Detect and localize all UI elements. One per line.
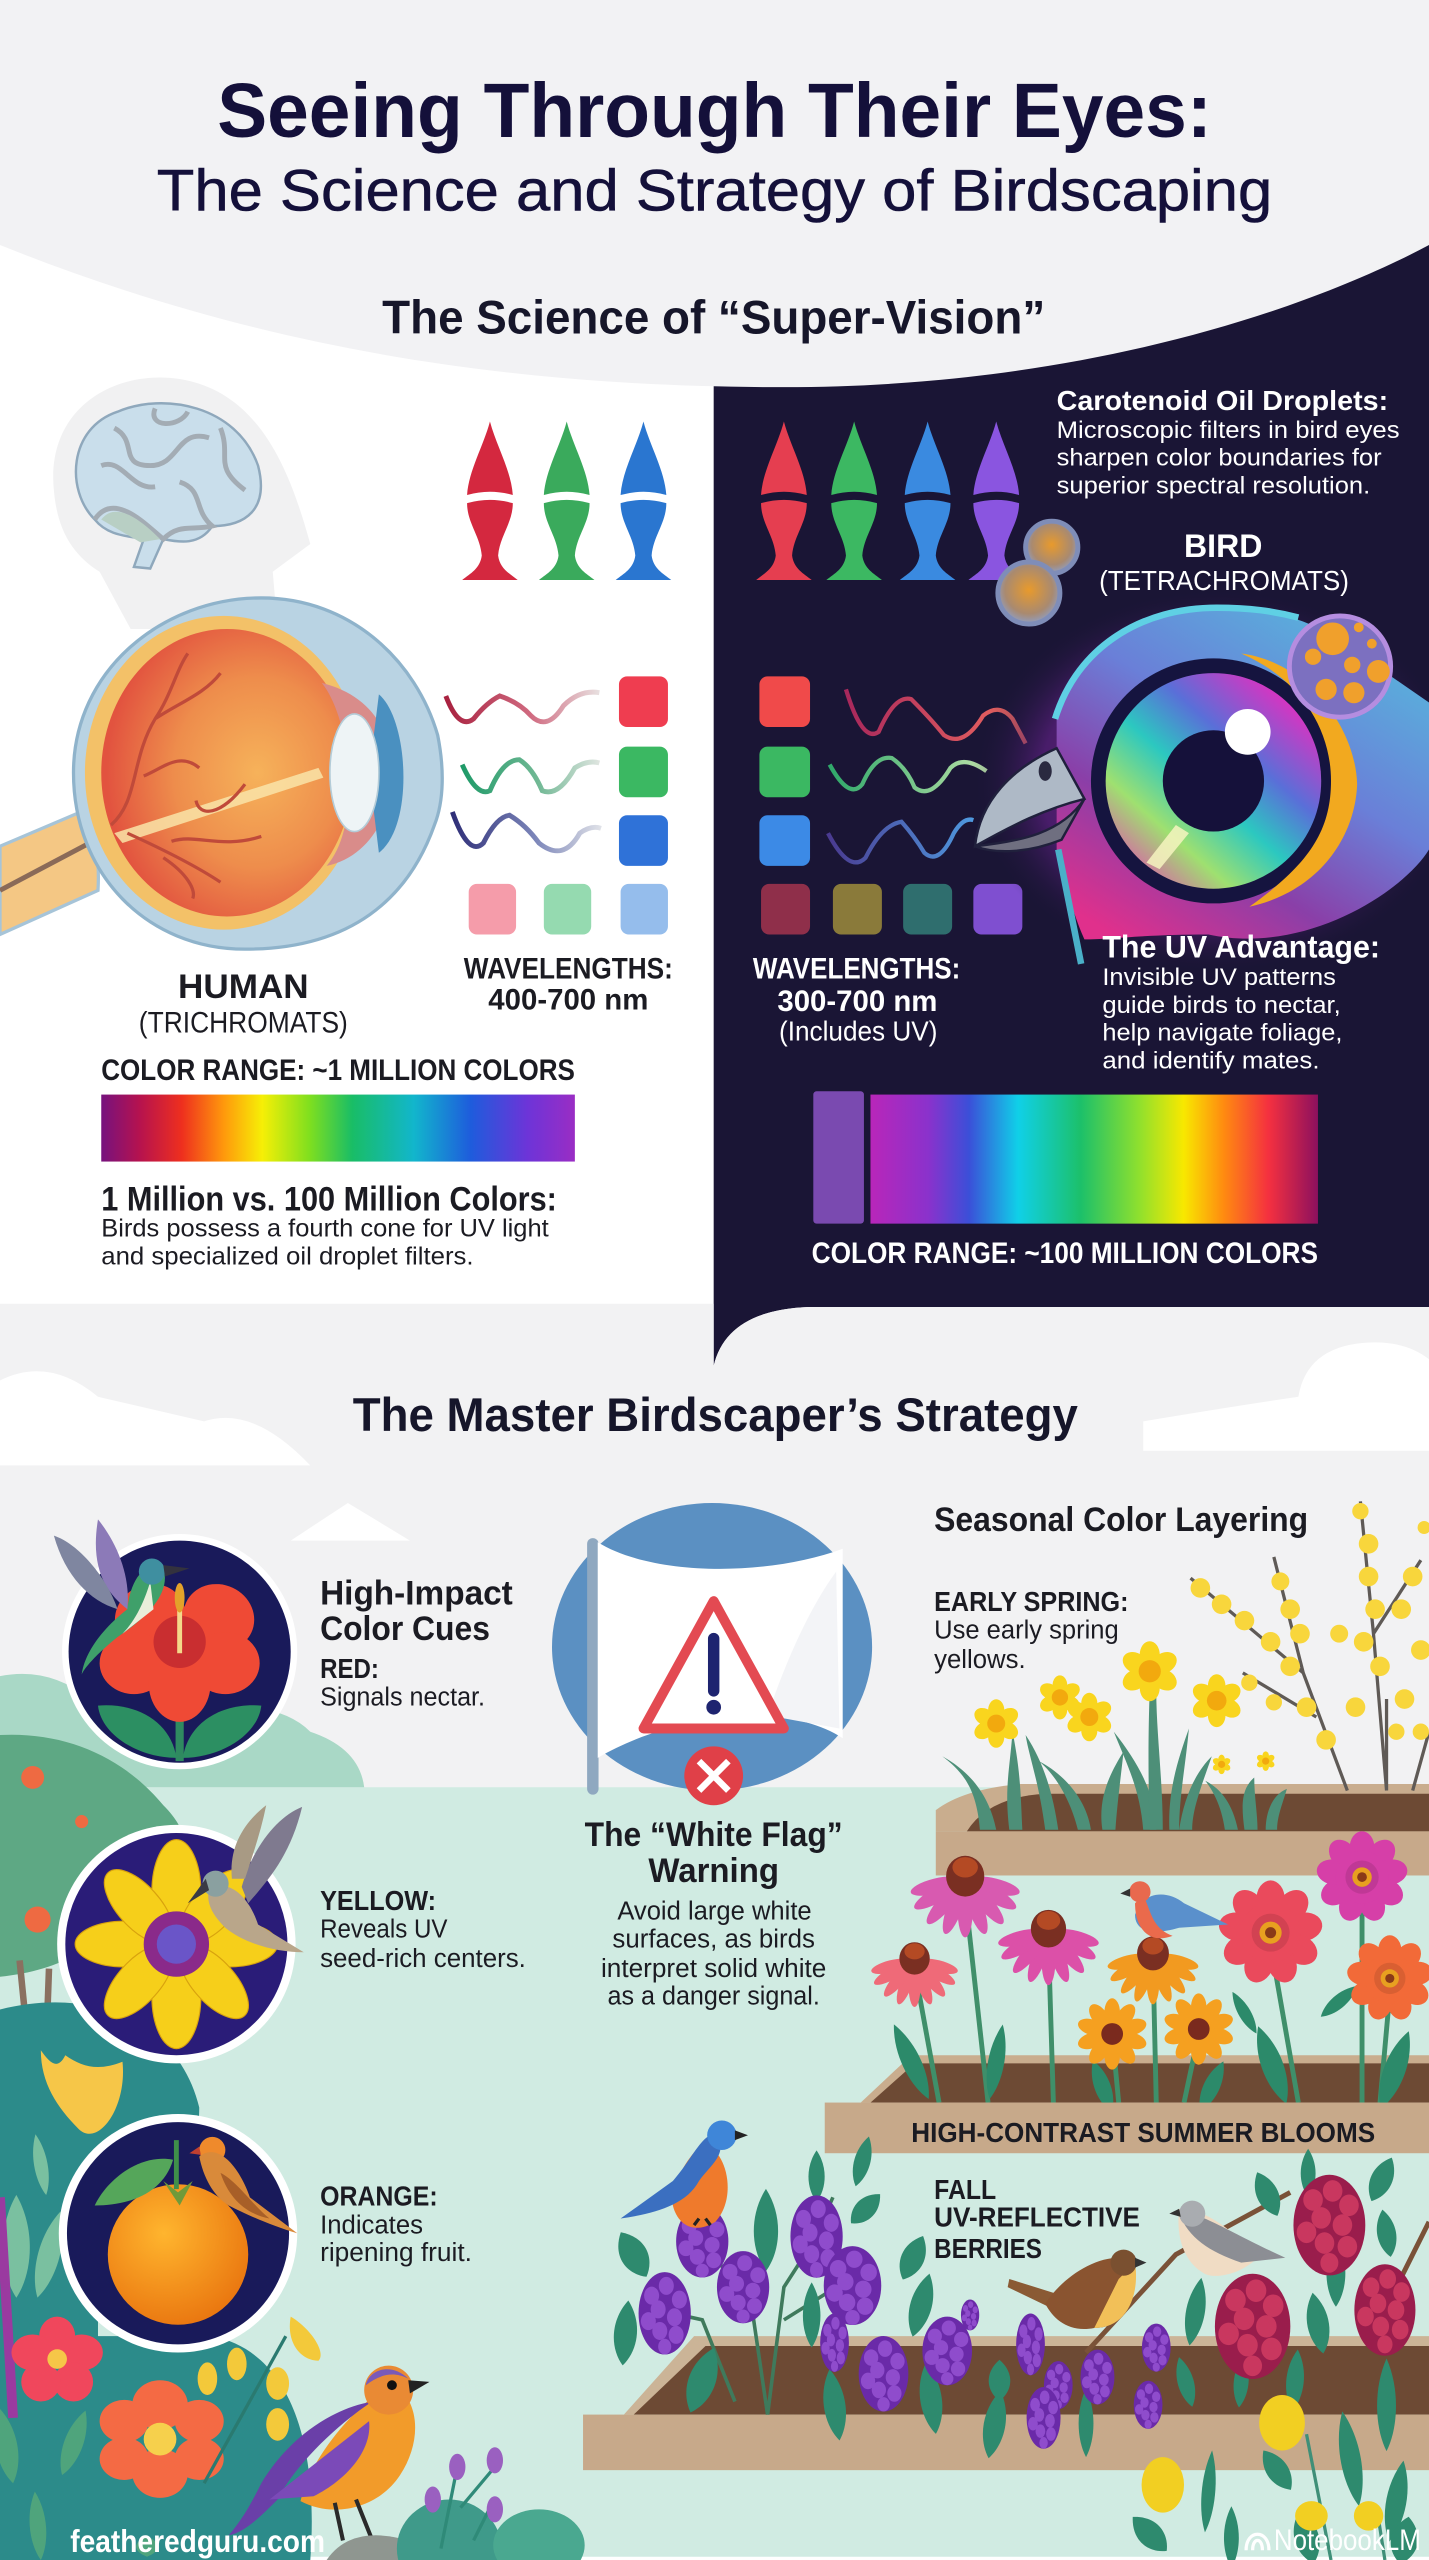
text block: the UV advantage: guide birds to nectar,: [1102, 992, 1341, 1019]
label: fall berries: [934, 2174, 1140, 2264]
icon: magnified oil droplet: [1289, 616, 1391, 717]
text block: early spring: [934, 1586, 1129, 1674]
icon: human eye cross-section: [0, 598, 442, 949]
heading: science of super-vision: The Science of “Super-Vision”: [382, 291, 1045, 344]
text block: high-impact colour cues / red: [320, 1574, 513, 1712]
label: bird colour range: COLOR RANGE: ~100 MILLION COLORS: [812, 1237, 1318, 1270]
icon: red flower: [11, 2317, 103, 2402]
text block: high-impact colour cues / red: High-Impact: [320, 1574, 513, 1612]
label: bird: BIRD: [1184, 527, 1262, 564]
text block: white flag warning: Avoid large white: [617, 1896, 812, 1926]
icon: red hibiscus with hummingbird: [54, 1519, 297, 1769]
icon: grey bird: [1169, 2201, 1285, 2276]
panel: header swoosh: [0, 0, 1429, 387]
text block: carotenoid oil droplets: Carotenoid Oil Droplets:: [1057, 385, 1388, 416]
label: human: [139, 968, 348, 1039]
label: bird wavelengths: WAVELENGTHS:: [753, 953, 960, 986]
illustration: spring planter: [936, 1501, 1429, 1875]
text block: yellow: Reveals UV: [320, 1914, 448, 1944]
chart: bird spectrum bar with UV band: [813, 1091, 1318, 1224]
icon: red cross badge: [684, 1746, 743, 1805]
label: human wavelengths: 400-700 nm: [488, 984, 648, 1017]
icon: bird colour swatches: [759, 676, 1022, 934]
text block: white flag warning: interpret solid white: [601, 1953, 826, 1983]
icon: human head silhouette with brain: [53, 378, 310, 629]
decoration: foreground purple buds and rock: [327, 2447, 585, 2560]
icon: small orange bird: [189, 2137, 297, 2233]
icon: orange and purple bird: [229, 2366, 430, 2540]
text block: early spring: Use early spring: [934, 1615, 1119, 1645]
illustration: summer planter: [825, 1831, 1429, 2153]
panel: strategy background: [0, 1304, 1429, 2560]
text block: yellow: seed-rich centers.: [320, 1943, 526, 1973]
text block: yellow: YELLOW:: [320, 1885, 436, 1916]
icon: orange fruit with bird: [59, 2114, 297, 2353]
icon: coneflowers: [870, 1856, 1200, 2007]
icon: human wavelengths: [446, 692, 601, 851]
icon: bird eye: [972, 588, 1429, 974]
label: bird: [1099, 527, 1349, 596]
decoration: foreground right garden: [1124, 2358, 1422, 2560]
text block: white flag warning: The “White Flag”: [585, 1816, 843, 1854]
label: bird: (TETRACHROMATS): [1099, 565, 1349, 596]
text block: the UV advantage: help navigate foliage,: [1102, 1020, 1342, 1047]
text block: white flag warning: surfaces, as birds: [612, 1923, 815, 1953]
text block: the UV advantage: The UV Advantage:: [1102, 929, 1380, 964]
label: bird wavelengths: 300-700 nm: [777, 985, 937, 1018]
text block: 1 million vs 100 million: [101, 1181, 557, 1270]
chart: human spectrum bar: [101, 1095, 575, 1162]
text block: the UV advantage: [1102, 929, 1380, 1074]
title: [157, 69, 1272, 224]
icon: red berries: [1215, 2175, 1415, 2379]
icon: hummingbird on yellow flower: [188, 1805, 304, 1952]
text block: white flag warning: as a danger signal.: [608, 1981, 820, 2011]
icon: human colour swatches: [469, 676, 668, 934]
text block: orange: [320, 2180, 472, 2267]
text block: white flag warning: [585, 1816, 843, 2011]
text block: high-impact colour cues / red: Signals nectar.: [320, 1682, 485, 1712]
text block: 1 million vs 100 million: and specialized oil droplet filters.: [101, 1242, 474, 1270]
text block: carotenoid oil droplets: superior spectral resolution.: [1057, 472, 1370, 499]
icon: bluebird: [621, 2121, 748, 2228]
label: bird wavelengths: (Includes UV): [779, 1016, 937, 1047]
text block: 1 million vs 100 million: Birds possess a fourth cone for UV light: [101, 1215, 549, 1243]
label: human: (TRICHROMATS): [139, 1006, 348, 1039]
label: fall berries: FALL: [934, 2174, 996, 2205]
label: fall berries: BERRIES: [934, 2233, 1042, 2264]
label: human: HUMAN: [178, 968, 309, 1006]
heading: seasonal colour layering: Seasonal Color Layering: [934, 1501, 1308, 1539]
icon: forsythia shrub: [1191, 1501, 1429, 1791]
title: The Science and Strategy of Birdscaping: [157, 159, 1272, 224]
illustration: fall planter: [583, 2121, 1429, 2470]
text block: carotenoid oil droplets: [1057, 385, 1400, 499]
label: fall berries: UV-REFLECTIVE: [934, 2202, 1140, 2233]
heading: master birdscaper's strategy: The Master Birdscaper’s Strategy: [353, 1389, 1079, 1442]
icon: berry branches and leaves: [609, 2134, 1429, 2460]
icon: human cones: [462, 421, 671, 580]
text block: early spring: EARLY SPRING:: [934, 1586, 1129, 1617]
text block: 1 million vs 100 million: 1 Million vs. 100 Million Colors:: [101, 1181, 557, 1219]
icon: summer red bird: [1120, 1881, 1228, 1938]
panel: bird vision dark background: [714, 245, 1429, 1366]
text block: early spring: yellows.: [934, 1644, 1026, 1674]
text block: carotenoid oil droplets: Microscopic filters in bird eyes: [1057, 417, 1400, 444]
text block: high-impact colour cues / red: Color Cues: [320, 1610, 490, 1648]
text block: the UV advantage: and identify mates.: [1102, 1047, 1320, 1074]
label: human wavelengths: [464, 953, 673, 1017]
icon: hummingbird: [54, 1519, 189, 1675]
icon: zinnias: [1217, 1831, 1429, 2023]
label: human colour range: COLOR RANGE: ~1 MILLION COLORS: [101, 1054, 575, 1087]
label: human wavelengths: WAVELENGTHS:: [464, 953, 673, 986]
text block: yellow: [320, 1885, 526, 1973]
title: Seeing Through Their Eyes:: [217, 69, 1212, 154]
icon: oil droplets: [998, 521, 1078, 624]
icon: bird cones: [756, 421, 1024, 580]
icon: wren: [1008, 2250, 1146, 2329]
text block: orange: ORANGE:: [320, 2180, 438, 2211]
icon: purple berries: [639, 2195, 1171, 2449]
text block: white flag warning: Warning: [648, 1852, 779, 1890]
icon: white flag warning: [552, 1503, 872, 1805]
text block: orange: ripening fruit.: [320, 2237, 472, 2267]
footer: website credit: featheredguru.com: [70, 2524, 325, 2559]
icon: daffodils: [942, 1641, 1287, 1830]
icon: orange daisies: [1076, 1993, 1235, 2070]
text block: high-impact colour cues / red: RED:: [320, 1653, 379, 1684]
icon: summer stems and leaves: [885, 1895, 1419, 2115]
label: summer blooms: HIGH-CONTRAST SUMMER BLOOMS: [911, 2117, 1375, 2148]
text block: orange: Indicates: [320, 2209, 423, 2239]
text block: carotenoid oil droplets: sharpen color boundaries for: [1057, 445, 1382, 472]
icon: yellow flower with hummingbird: [57, 1805, 304, 2063]
icon: bird wavelengths: [828, 689, 1026, 862]
icon: orange flower: [100, 2380, 224, 2498]
text block: the UV advantage: Invisible UV patterns: [1102, 964, 1336, 991]
decoration: left garden foliage: [0, 1674, 364, 2560]
label: bird wavelengths: [753, 953, 960, 1047]
